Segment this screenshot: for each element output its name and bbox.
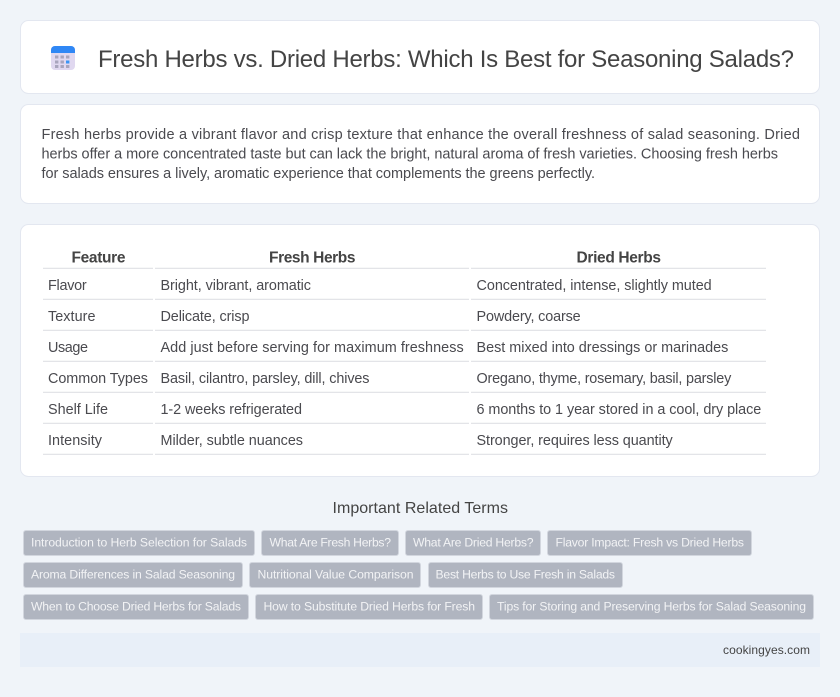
row: usage (48, 340, 728, 356)
tag: Introduction to Herb Selection for Salads (31, 536, 247, 550)
row: shelf life: 1-2 weeks refrigerated (160, 402, 302, 418)
tag: Best Herbs to Use Fresh in Salads (436, 568, 615, 582)
tag (256, 594, 482, 620)
row: usage: Add just before serving for maximum freshness (160, 340, 464, 356)
row: texture: Delicate, crisp (160, 309, 250, 325)
panel: related term tags (24, 530, 814, 620)
tag (24, 530, 254, 556)
row: intensity (48, 433, 673, 449)
row: intensity: Milder, subtle nuances (160, 433, 303, 449)
description text: herbs offer a more concentrated taste but can lack the bright, natural aroma of fresh varieties. Choosing fresh herbs (42, 146, 778, 162)
row: texture: Texture (48, 309, 96, 325)
description text (42, 127, 800, 182)
panel: comparison table (20, 224, 820, 476)
tag: What Are Fresh Herbs? (270, 536, 391, 550)
row: intensity: Stronger, requires less quantity (476, 433, 673, 449)
icon: calendar (51, 46, 75, 70)
row: common types: Basil, cilantro, parsley, dill, chives (160, 371, 370, 387)
table row lines (43, 268, 766, 454)
tag (490, 594, 814, 620)
footer source: cookingyes.com (723, 643, 810, 657)
row: usage: Best mixed into dressings or marinades (476, 340, 728, 356)
tag (406, 530, 540, 556)
row: texture: Powdery, coarse (476, 309, 581, 325)
row: intensity: Intensity (48, 433, 103, 449)
row: shelf life (48, 402, 761, 418)
table header row: Feature (72, 250, 126, 266)
heading: important related terms: Important Related Terms (332, 500, 508, 517)
row: shelf life: Shelf Life (48, 402, 108, 418)
tag (250, 562, 420, 588)
tag: When to Choose Dried Herbs for Salads (31, 600, 241, 614)
panel: description (20, 104, 820, 204)
tag: Tips for Storing and Preserving Herbs for Salad Seasoning (497, 600, 806, 614)
description text: Fresh herbs provide a vibrant flavor and crisp texture that enhance the overall freshness of salad seasoning. Dried (42, 127, 800, 143)
row: common types (48, 371, 732, 387)
tag: Flavor Impact: Fresh vs Dried Herbs (556, 536, 744, 550)
tag (428, 562, 622, 588)
row: flavor: Flavor (48, 278, 87, 294)
tag (24, 594, 248, 620)
footer (20, 633, 820, 667)
tag: How to Substitute Dried Herbs for Fresh (264, 600, 475, 614)
row: texture (48, 309, 581, 325)
tag (24, 562, 242, 588)
table header row: Dried Herbs (576, 250, 661, 266)
row: usage: Usage (48, 340, 88, 356)
table header row: Fresh Herbs (269, 250, 356, 266)
panel: header (20, 20, 820, 94)
tag: What Are Dried Herbs? (413, 536, 534, 550)
tag: Nutritional Value Comparison (258, 568, 414, 582)
description text: for salads ensures a lively, aromatic experience that complements the greens perfectly. (42, 166, 595, 182)
row: flavor: Bright, vibrant, aromatic (160, 278, 311, 294)
table header row (72, 250, 661, 266)
row: common types: Common Types (48, 371, 148, 387)
row: common types: Oregano, thyme, rosemary, basil, parsley (476, 371, 732, 387)
tag: Aroma Differences in Salad Seasoning (31, 568, 235, 582)
row: flavor (48, 278, 712, 294)
row: shelf life: 6 months to 1 year stored in a cool, dry place (476, 402, 761, 418)
tag (262, 530, 398, 556)
tag (548, 530, 752, 556)
title: Fresh Herbs vs. Dried Herbs: Which Is Best for Seasoning Salads? (98, 46, 794, 73)
row: flavor: Concentrated, intense, slightly muted (476, 278, 712, 294)
